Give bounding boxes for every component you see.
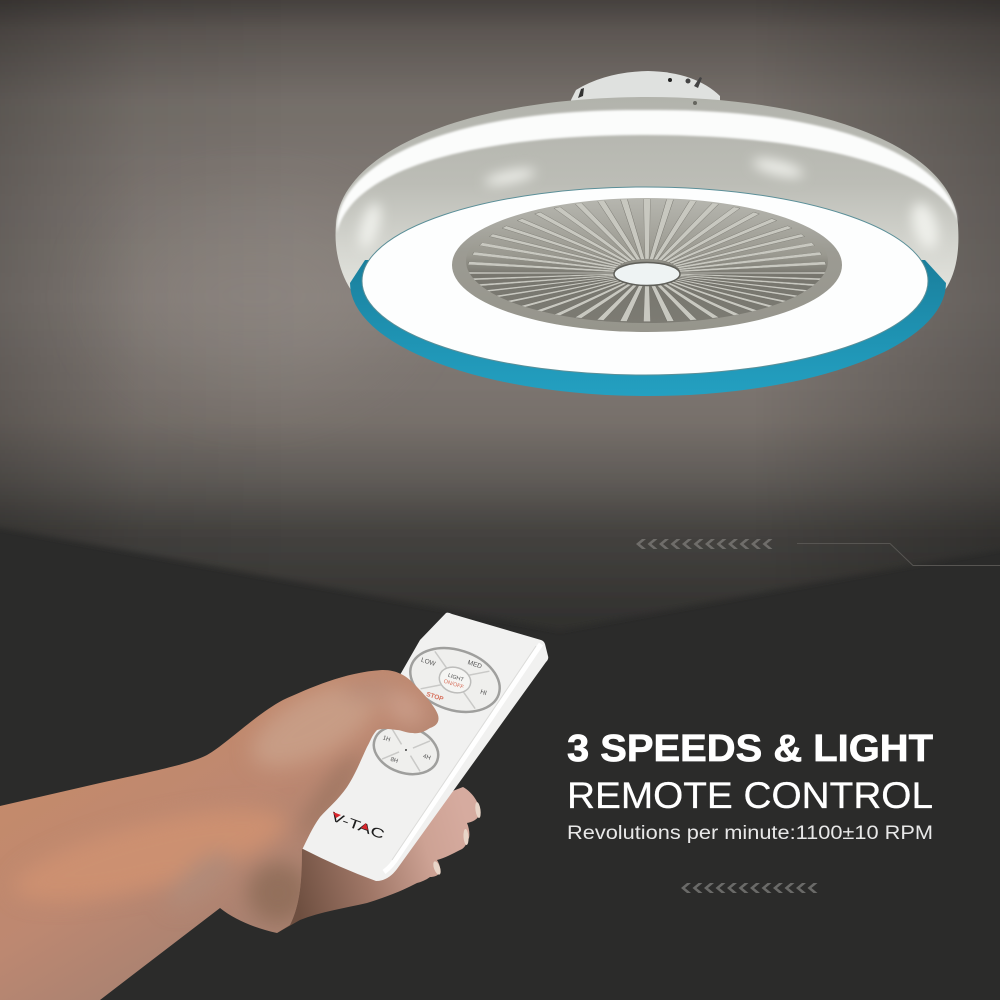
decorative circuit line	[797, 544, 1000, 566]
fan centre hub	[614, 262, 680, 286]
hand: fingers behind remote	[277, 787, 480, 933]
V-TAC logo	[329, 809, 387, 842]
heading: remote control: REMOTE CONTROL	[567, 775, 933, 816]
remote control	[302, 613, 548, 881]
fan mounting plate	[571, 71, 720, 110]
speed dial	[402, 637, 508, 723]
timer dial: 4H	[422, 754, 431, 762]
dial labels: ON/OFF	[443, 679, 465, 691]
fan outer shell	[336, 97, 958, 290]
V-TAC logo: V-TAC	[329, 809, 387, 842]
dial labels	[410, 645, 495, 715]
dial labels: LOW	[420, 657, 437, 668]
timer dial: 8H	[389, 757, 399, 765]
decorative chevron row top	[636, 539, 772, 549]
remote side bevel	[384, 644, 541, 872]
dial labels: LIGHT	[447, 673, 465, 684]
dial labels: HI	[479, 689, 488, 697]
skin highlights and shadows	[23, 809, 286, 900]
finger nails	[432, 802, 482, 876]
dial labels: STOP	[425, 691, 445, 703]
heading: 3 speeds & light: 3 SPEEDS & LIGHT	[567, 728, 933, 770]
dial labels: MED	[467, 659, 483, 670]
timer dial: 1H	[382, 735, 391, 743]
timer dial	[368, 718, 444, 782]
background: lit ceiling	[0, 0, 1000, 630]
fan blade grille	[452, 197, 842, 332]
hand: palm and thumb over remote	[0, 660, 445, 1000]
fan upper light band	[337, 110, 958, 233]
headline block	[567, 728, 933, 844]
fan white light ring	[362, 187, 928, 375]
subtext: revolutions per minute: Revolutions per minute:1100±10 RPM	[567, 823, 933, 844]
decorative chevron row bottom	[681, 883, 818, 893]
fan blue inner rim	[350, 260, 946, 396]
product: ceiling fan with light	[336, 71, 958, 396]
remote body	[302, 613, 548, 881]
